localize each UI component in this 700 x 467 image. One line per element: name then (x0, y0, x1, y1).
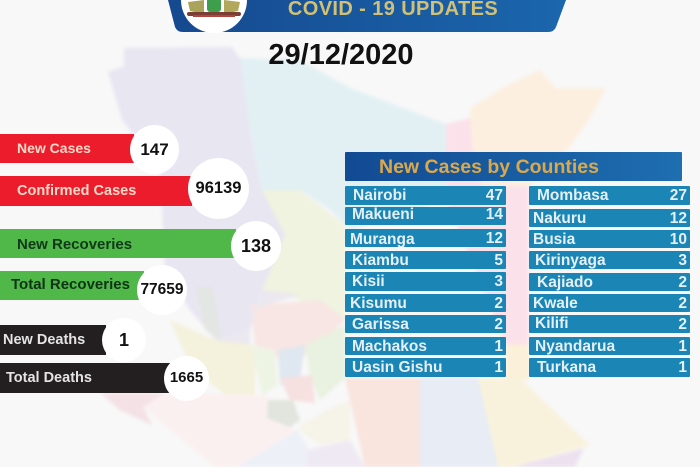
row: Nakuru: 12 (670, 210, 687, 227)
row: Nakuru: Nakuru (533, 210, 586, 227)
row: Kisumu: Kisumu (350, 295, 407, 312)
row: Mombasa (529, 186, 690, 205)
row: Mombasa: Mombasa (537, 187, 608, 204)
bar: total recoveries (0, 271, 144, 300)
row: Garissa (345, 315, 506, 333)
row: Kilifi: 2 (678, 316, 687, 333)
row: Kirinyaga: Kirinyaga (535, 252, 606, 269)
row: Turkana: 1 (678, 359, 687, 376)
value: new recoveries (231, 221, 281, 271)
panel heading: New Cases by Counties (379, 156, 599, 178)
bar: total deaths: Total Deaths (6, 370, 92, 386)
row: Kiambu (345, 251, 506, 269)
panel: left county column (345, 186, 506, 377)
row: Kiambu: 5 (494, 252, 503, 269)
bar: total recoveries: Total Recoveries (11, 276, 130, 293)
row: Nyandarua: 1 (678, 338, 687, 355)
row: Muranga: Muranga (350, 231, 415, 248)
row: Nyandarua: Nyandarua (535, 338, 615, 355)
row: Kajiado: Kajiado (537, 274, 593, 291)
value: new recoveries: 138 (241, 236, 271, 256)
row: Uasin Gishu (345, 358, 506, 377)
row: Uasin Gishu: 1 (494, 359, 503, 376)
bar: new deaths: New Deaths (3, 332, 85, 348)
row: Makueni (345, 207, 506, 225)
value: confirmed cases: 96139 (196, 179, 241, 197)
row: Makueni: Makueni (352, 206, 414, 223)
value: total deaths: 1665 (170, 369, 203, 386)
value: new deaths (102, 318, 146, 362)
value: new deaths: 1 (119, 330, 129, 350)
row: Kisumu: 2 (494, 295, 503, 312)
panel: new cases by counties header (345, 152, 682, 181)
row: Busia (529, 230, 690, 248)
row: Nairobi: 47 (486, 187, 503, 204)
row: Kisii: Kisii (352, 273, 385, 290)
row: Kiambu: Kiambu (352, 252, 409, 269)
row: Turkana (529, 358, 690, 377)
value: total recoveries (137, 265, 187, 315)
row: Mombasa: 27 (670, 187, 687, 204)
row: Garissa: 2 (494, 316, 503, 333)
row: Nairobi: Nairobi (353, 187, 406, 204)
row: Kisumu (345, 294, 506, 312)
row: Kilifi: Kilifi (535, 315, 569, 332)
row: Kajiado (529, 273, 690, 291)
bar: new cases: New Cases (17, 140, 91, 156)
row: Muranga: 12 (486, 230, 503, 247)
row: Garissa: Garissa (352, 316, 409, 333)
row: Machakos (345, 337, 506, 355)
bar: total deaths (0, 363, 170, 393)
bar: new recoveries (0, 229, 236, 258)
value: confirmed cases (188, 158, 249, 219)
row: Kwale: Kwale (533, 295, 578, 312)
row: Kirinyaga (529, 251, 690, 269)
bar: confirmed cases: Confirmed Cases (17, 183, 136, 199)
date: 29/12/2020 (268, 39, 414, 71)
row: Makueni: 14 (486, 206, 503, 223)
value: new cases (130, 125, 179, 174)
row: Busia: Busia (533, 231, 575, 248)
row: Nairobi (345, 186, 506, 205)
value: new cases: 147 (140, 140, 169, 159)
row: Kirinyaga: 3 (678, 252, 687, 269)
bar: new cases (0, 134, 134, 163)
row: Kwale: 2 (678, 295, 687, 312)
row: Turkana: Turkana (537, 359, 596, 376)
logo: coat of arms (181, 0, 247, 33)
row: Muranga (345, 229, 506, 247)
row: Kilifi (529, 315, 690, 333)
bar: confirmed cases (0, 176, 192, 206)
row: Nakuru (529, 209, 690, 227)
row: Busia: 10 (670, 231, 687, 248)
row: Nyandarua (529, 337, 690, 355)
row: Uasin Gishu: Uasin Gishu (352, 359, 442, 376)
bar: new deaths (0, 325, 106, 355)
row: Kisii: 3 (494, 273, 503, 290)
panel: right county column (529, 186, 690, 377)
value: total recoveries: 77659 (140, 281, 184, 298)
row: Kajiado: 2 (678, 274, 687, 291)
row: Machakos: 1 (494, 338, 503, 355)
value: total deaths (164, 356, 209, 401)
row: Machakos: Machakos (352, 338, 427, 355)
row: Kwale (529, 294, 690, 312)
row: Kisii (345, 272, 506, 291)
bar: new recoveries: New Recoveries (17, 236, 132, 253)
header banner (168, 0, 566, 32)
